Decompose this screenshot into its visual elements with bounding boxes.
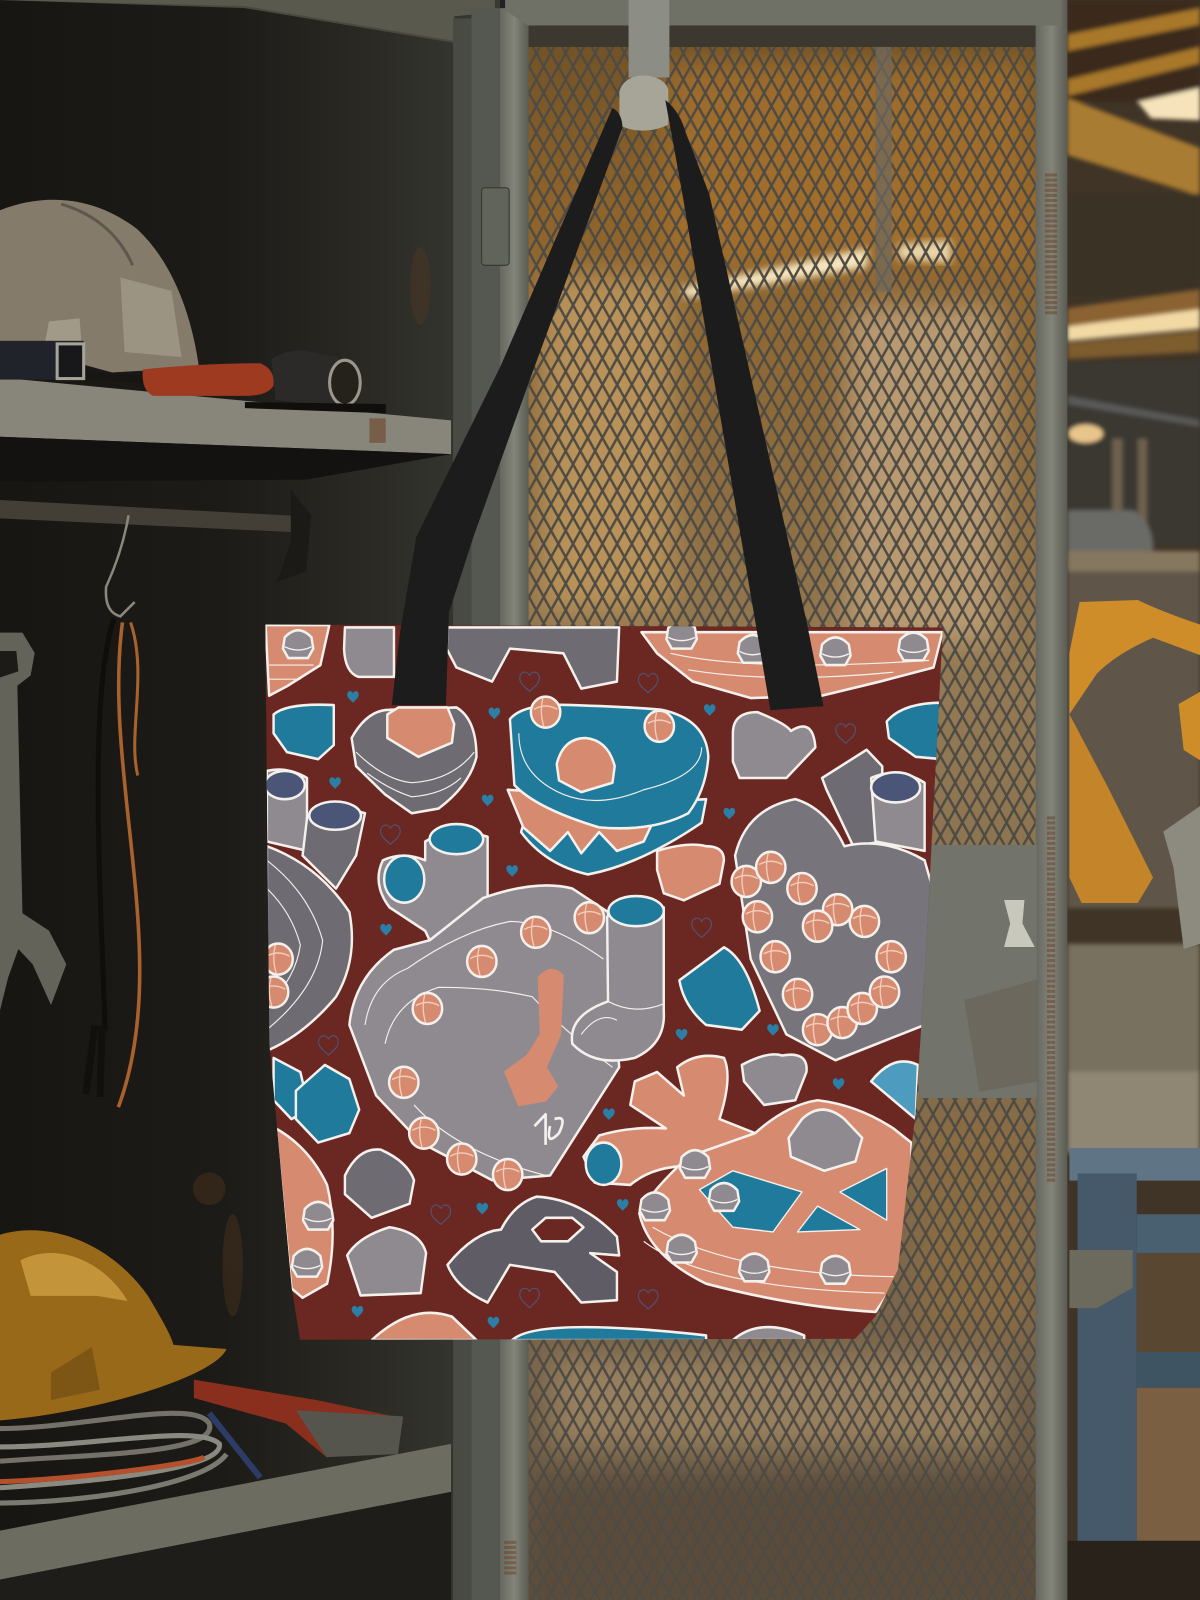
stacked grey heart with nut <box>352 707 476 813</box>
small grey heart <box>742 1054 807 1105</box>
hanging rail <box>0 490 311 582</box>
central grey heart <box>349 885 619 1190</box>
mesh panel <box>526 20 1041 1600</box>
pipe pair above central heart <box>379 824 488 940</box>
elbow pipe <box>572 896 664 1061</box>
grey heart top <box>733 712 815 778</box>
crank handle <box>505 970 563 1105</box>
cable bundle and pliers <box>0 1380 403 1503</box>
tote bag <box>259 621 943 1340</box>
icon: wrench <box>0 633 66 1010</box>
bag handle: front strap <box>392 108 622 705</box>
locker interior <box>0 0 500 1600</box>
upper shelf <box>0 378 451 482</box>
copper heart machine <box>639 1100 912 1312</box>
locker hook <box>619 0 669 131</box>
blue heart with nut and gear <box>508 697 708 874</box>
scattered mini hearts <box>319 672 856 1328</box>
small copper heart <box>657 845 724 900</box>
icon: yellow hard hat <box>0 1230 227 1420</box>
latch plate <box>918 845 1037 1098</box>
robot arm <box>1069 600 1200 949</box>
grey hex nut <box>345 1149 414 1218</box>
left copper wheel <box>276 1128 333 1298</box>
bottom edge motifs <box>372 1313 804 1340</box>
hook and cables <box>86 515 140 1107</box>
tools on upper shelf <box>0 341 386 413</box>
grey heart bottom <box>347 1227 426 1295</box>
grey heart with copper bolts ring <box>732 750 931 1060</box>
lower shelf <box>0 1444 451 1600</box>
workbench <box>1067 1148 1200 1600</box>
icon: grey hard hat <box>0 200 199 372</box>
small blue hearts top <box>274 703 942 759</box>
bag handle: back strap <box>665 100 823 710</box>
logo mark <box>534 1114 563 1145</box>
factory background <box>1061 0 1200 1600</box>
blue hearts middle <box>679 947 918 1119</box>
blue pipe and nut <box>274 1058 359 1143</box>
top edge motifs <box>266 621 942 698</box>
door frame <box>482 0 1067 1600</box>
grey spanner <box>447 1197 619 1302</box>
left pipes and grey wheel <box>259 770 365 1051</box>
copper pipes <box>583 1056 755 1185</box>
